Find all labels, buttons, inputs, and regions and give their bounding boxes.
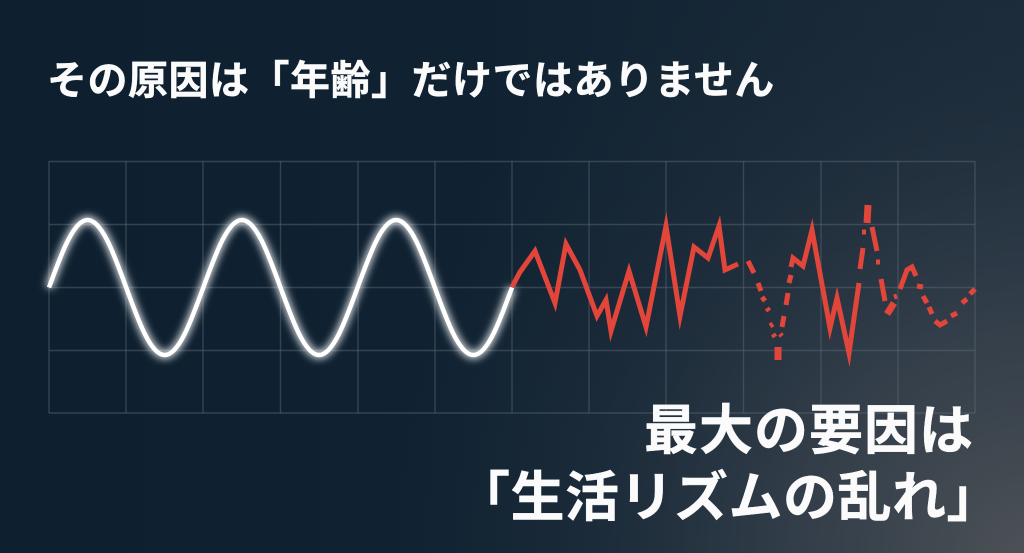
conclusion text: 最大の要因は xyxy=(644,401,974,461)
title: その原因は「年齢」だけではありません xyxy=(47,59,775,103)
chart: rhythm waveform xyxy=(49,161,975,413)
conclusion text: 「生活リズムの乱れ」 xyxy=(456,468,1001,528)
white sine wave: regular rhythm xyxy=(49,220,512,355)
red jagged line: disrupted rhythm xyxy=(512,205,975,360)
conclusion text xyxy=(456,401,1001,528)
